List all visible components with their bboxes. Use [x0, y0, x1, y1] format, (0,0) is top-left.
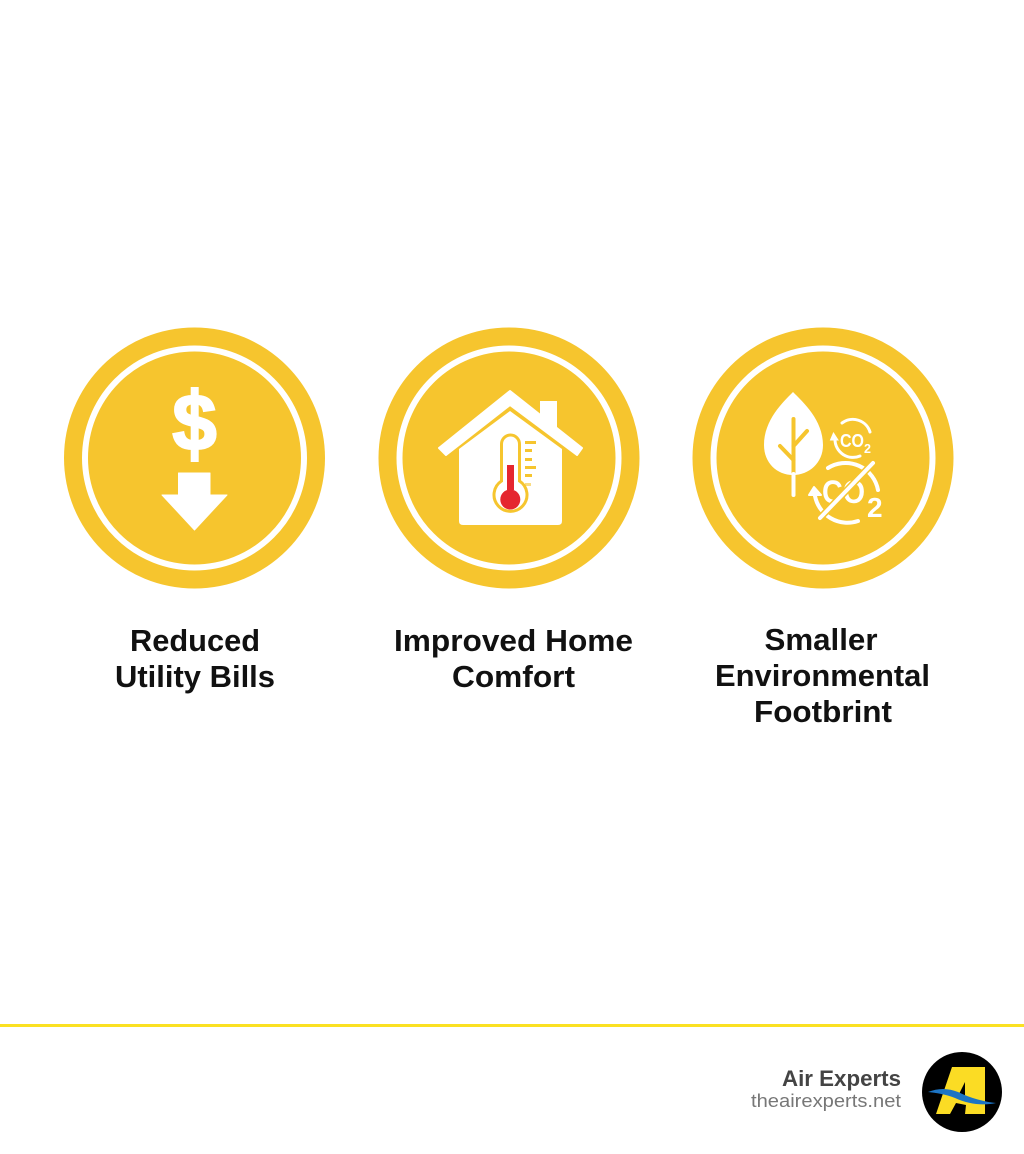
icon: crossed out CO2 cycle: 2: [867, 492, 883, 523]
thermometer scale ticks: [525, 441, 536, 486]
icon: small CO2 cycle: [830, 419, 871, 457]
badge: yellow circle with ring: [692, 328, 954, 588]
icon: crossed out CO2 cycle: CO: [822, 474, 865, 510]
brand name: Air Experts: [782, 1066, 901, 1091]
icon: house with thermometer: [439, 391, 582, 525]
heading: smaller environmental footbrint: Smaller: [764, 622, 878, 657]
icon: crossed out CO2 cycle: [809, 463, 883, 523]
logo: air experts badge: [922, 1052, 1002, 1132]
heading: reduced utility bills: Reduced: [130, 623, 260, 658]
footer divider line: [0, 1024, 1024, 1027]
house chimney: [540, 401, 557, 432]
heading: improved home comfort: Improved Home: [394, 623, 633, 658]
badge: yellow circle with ring: [378, 328, 640, 588]
icon: down arrow: [162, 473, 227, 530]
heading: improved home comfort: Comfort: [452, 659, 575, 694]
heading: smaller environmental footbrint: Environmental: [715, 658, 930, 693]
icon: leaf: [764, 392, 823, 495]
heading: smaller environmental footbrint: Footbrint: [754, 694, 892, 729]
house body: [459, 411, 562, 525]
thermometer: [494, 435, 527, 511]
panel: reduced utility bills: [64, 328, 325, 694]
heading: reduced utility bills: Utility Bills: [115, 659, 275, 694]
icon: small CO2 cycle: 2: [864, 442, 871, 456]
icon: dollar sign: $: [172, 378, 217, 467]
panel: smaller environmental footprint: [692, 328, 954, 729]
badge: yellow circle with ring: [64, 328, 325, 588]
house roof: [439, 391, 582, 455]
brand website: theairexperts.net: [751, 1090, 901, 1111]
panel: improved home comfort: [378, 328, 640, 694]
icon: small CO2 cycle: CO: [840, 431, 864, 451]
footer brand: [751, 1052, 1002, 1132]
